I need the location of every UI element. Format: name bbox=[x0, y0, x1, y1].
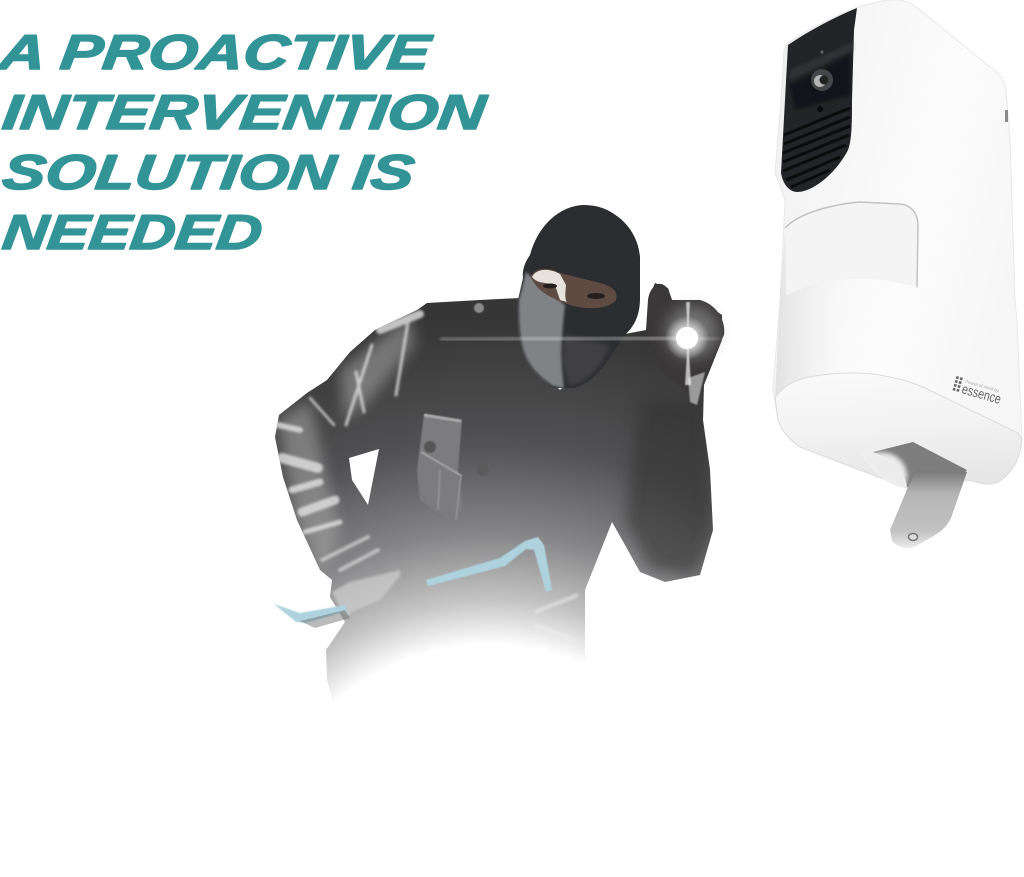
motion sensor window bbox=[785, 202, 918, 296]
title: NEEDED bbox=[0, 205, 265, 260]
flashlight beam flare bbox=[440, 302, 730, 385]
sleeve highlights bbox=[278, 314, 420, 570]
security camera device bbox=[773, 0, 1022, 548]
title: INTERVENTION bbox=[0, 85, 490, 140]
skin highlight bbox=[532, 270, 567, 302]
lower body left shading bbox=[775, 205, 860, 397]
crowbar bbox=[274, 537, 552, 623]
flashlight hand bbox=[648, 284, 724, 405]
lens bbox=[811, 69, 833, 91]
eyes bbox=[543, 284, 605, 299]
arm gap bbox=[349, 449, 379, 505]
side button bbox=[1005, 110, 1008, 122]
brand logo: Peace of mind by bbox=[965, 379, 1000, 393]
infographic canvas bbox=[0, 0, 1022, 698]
title bbox=[0, 25, 490, 260]
mask lit side bbox=[519, 272, 565, 388]
jacket torso and arms bbox=[275, 283, 722, 707]
pocket bbox=[417, 303, 489, 520]
speaker grille bbox=[783, 108, 850, 187]
panel highlight bands bbox=[790, 42, 853, 80]
camera bracket and sensor opening bbox=[860, 442, 967, 548]
camera face panel bbox=[781, 8, 857, 192]
brand logo bbox=[952, 376, 1004, 407]
base shell bbox=[775, 373, 1022, 488]
gloved hand on crowbar bbox=[332, 570, 400, 618]
belt buckle bbox=[535, 595, 578, 640]
sensor dot bbox=[817, 106, 823, 112]
mask lower shade bbox=[562, 335, 610, 387]
left sleeve light sheen bbox=[278, 315, 415, 575]
eye opening bbox=[531, 269, 617, 308]
brand logo: essence bbox=[960, 380, 1003, 407]
title: A PROACTIVE bbox=[0, 25, 436, 80]
balaclava bbox=[518, 205, 640, 388]
title: SOLUTION IS bbox=[0, 145, 418, 200]
upper camera body bbox=[773, 0, 1022, 490]
crowbar shadow tip bbox=[300, 610, 350, 628]
burglar figure bbox=[274, 205, 730, 707]
right sleeve shading bbox=[625, 400, 712, 575]
